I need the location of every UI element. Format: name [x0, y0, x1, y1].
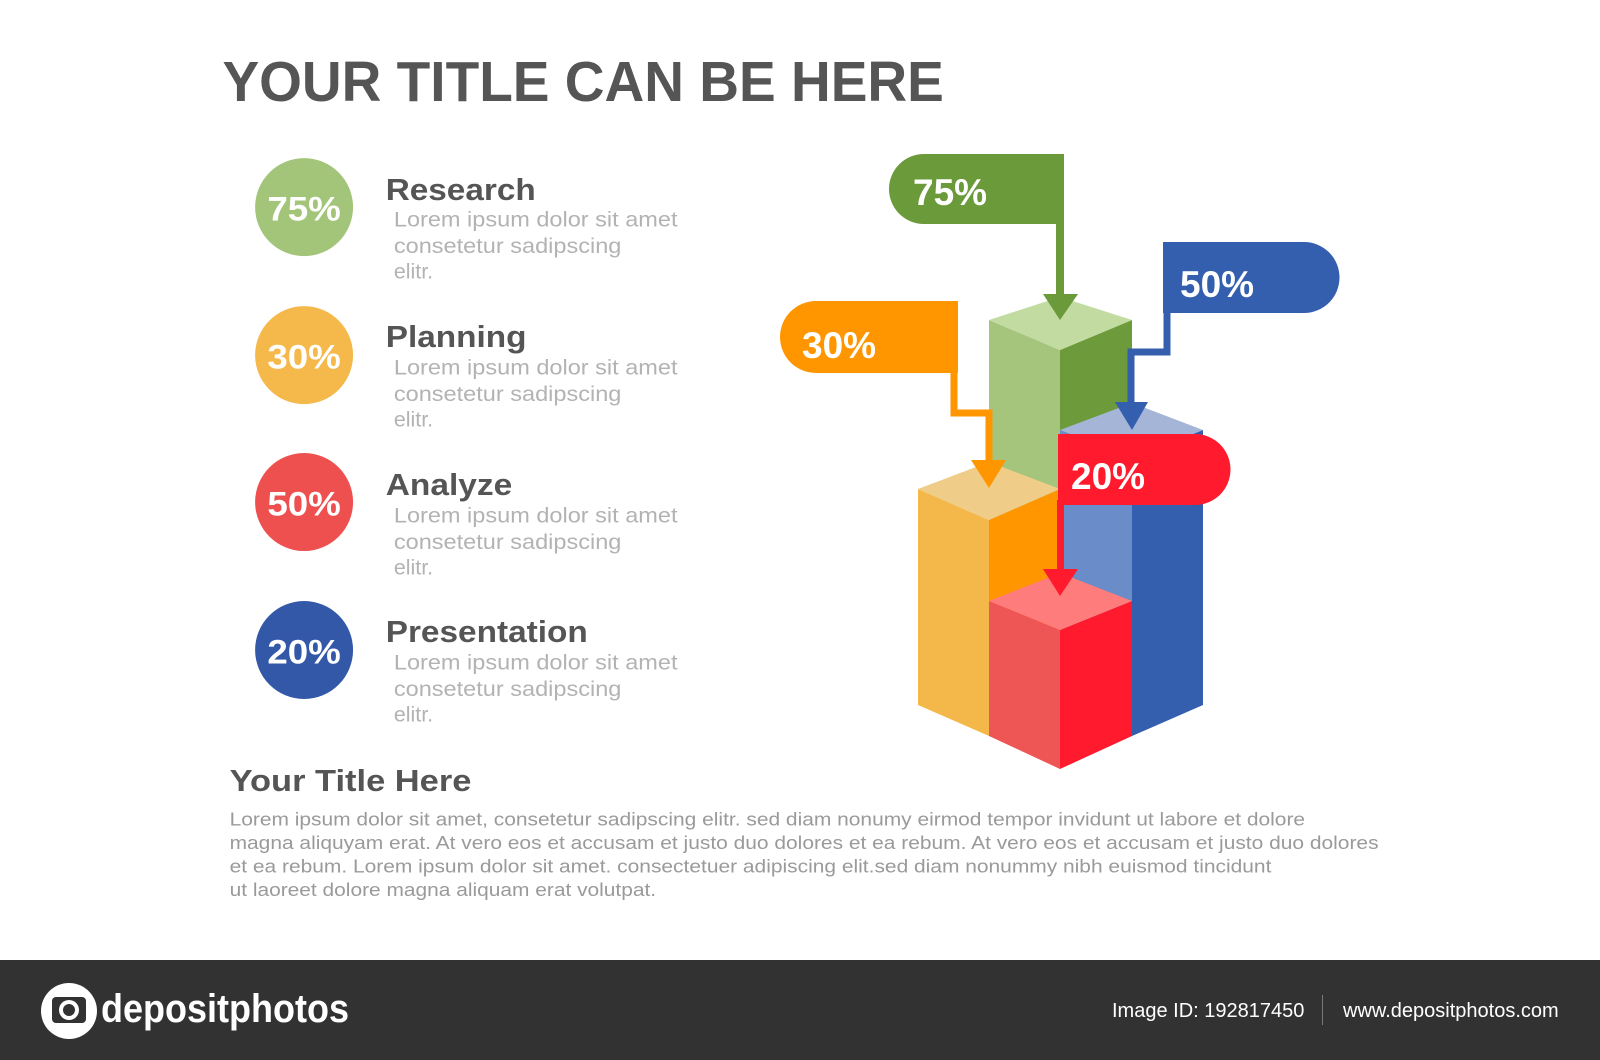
bar: blue 50% — [1060, 403, 1203, 736]
callout: 75% — [889, 154, 1078, 320]
website: www.depositphotos.com — [1342, 1000, 1559, 1022]
chart: isometric bars — [780, 154, 1340, 769]
callout: 30% — [780, 301, 1006, 488]
text: presentation body: elitr. — [394, 702, 433, 726]
badge: 30% — [255, 306, 353, 404]
text: research body: elitr. — [394, 260, 433, 284]
callout: 50%: 50% — [1180, 264, 1254, 305]
paragraph: Lorem ipsum dolor sit amet, consetetur sadipscing elitr. sed diam nonumy eirmod tempor invidunt ut labore et dolore — [230, 809, 1305, 830]
badge: 20%: 20% — [267, 633, 341, 671]
subtitle: Your Title Here — [230, 764, 471, 798]
heading: planning: Planning — [386, 320, 527, 354]
callout: 30%: 30% — [802, 325, 876, 366]
text: presentation body: consetetur sadipscing — [394, 677, 621, 701]
bar: green 75% — [989, 297, 1132, 640]
callout: 20%: 20% — [1071, 456, 1145, 497]
item: planning — [255, 306, 678, 432]
footer bar — [0, 960, 1600, 1060]
text: research body: Lorem ipsum dolor sit amet — [394, 208, 678, 232]
image id: Image ID: 192817450 — [1112, 1000, 1304, 1022]
callout: 75%: 75% — [913, 172, 987, 213]
item: presentation — [255, 601, 678, 726]
callout: 50% — [1115, 242, 1340, 430]
heading: presentation: Presentation — [386, 615, 588, 649]
text: planning body: Lorem ipsum dolor sit amet — [394, 355, 678, 379]
text: planning body: consetetur sadipscing — [394, 382, 621, 406]
text: planning body: elitr. — [394, 408, 433, 432]
paragraph: et ea rebum. Lorem ipsum dolor sit amet. consectetuer adipiscing elit.sed diam nonummy nibh euismod tincidunt — [230, 855, 1272, 876]
badge: 50%: 50% — [267, 485, 341, 523]
badge: 30%: 30% — [267, 338, 341, 376]
paragraph: magna aliquyam erat. At vero eos et accusam et justo duo dolores et ea rebum. At vero eos et accusam et justo duo dolores — [230, 832, 1379, 853]
item: analyze — [255, 453, 678, 579]
badge: 50% — [255, 453, 353, 551]
bar: orange 30% — [918, 462, 1060, 736]
bar: red 20% — [989, 573, 1132, 769]
item: research — [255, 158, 678, 284]
heading: research: Research — [386, 173, 536, 207]
text: analyze body: elitr. — [394, 555, 433, 579]
heading: analyze: Analyze — [386, 468, 512, 502]
logo text: depositphotos — [101, 987, 349, 1031]
title: YOUR TITLE CAN BE HERE — [222, 50, 944, 113]
text: analyze body: consetetur sadipscing — [394, 530, 621, 554]
text: analyze body: Lorem ipsum dolor sit amet — [394, 503, 678, 527]
text: research body: consetetur sadipscing — [394, 234, 621, 258]
badge: 75%: 75% — [267, 190, 341, 228]
text: presentation body: Lorem ipsum dolor sit amet — [394, 650, 678, 674]
paragraph: ut laoreet dolore magna aliquam erat volutpat. — [230, 879, 656, 900]
icon: camera logo — [41, 983, 97, 1039]
callout: 20% — [1043, 434, 1230, 596]
badge: 20% — [255, 601, 353, 699]
badge: 75% — [255, 158, 353, 256]
